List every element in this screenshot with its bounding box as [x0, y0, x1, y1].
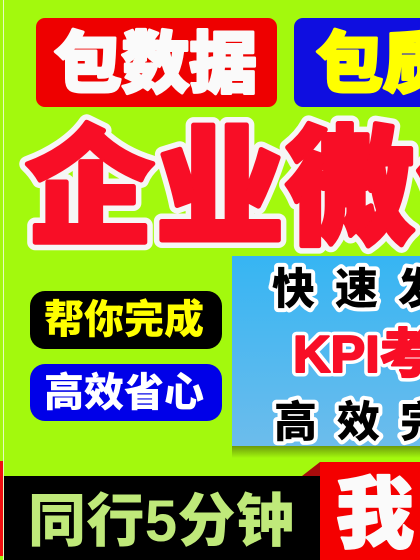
ribbon fold — [302, 462, 320, 476]
bottom bar: 同行5分钟: 同行5分钟 — [28, 489, 294, 554]
pill: 高效省心: 高效省心 — [44, 371, 204, 415]
badge: 包质 — [294, 18, 420, 107]
badge: 包数据: 包数据 — [54, 27, 257, 102]
bottom bar: 同行5分钟 — [4, 476, 322, 560]
pill: 帮你完成: 帮你完成 — [44, 297, 204, 342]
panel: 快速 KPI — [232, 256, 420, 458]
red box: 我: 我 — [336, 470, 414, 558]
pill: 帮你完成 — [30, 291, 222, 349]
left edge strip — [0, 0, 4, 560]
pill: 高效省心 — [30, 364, 222, 421]
